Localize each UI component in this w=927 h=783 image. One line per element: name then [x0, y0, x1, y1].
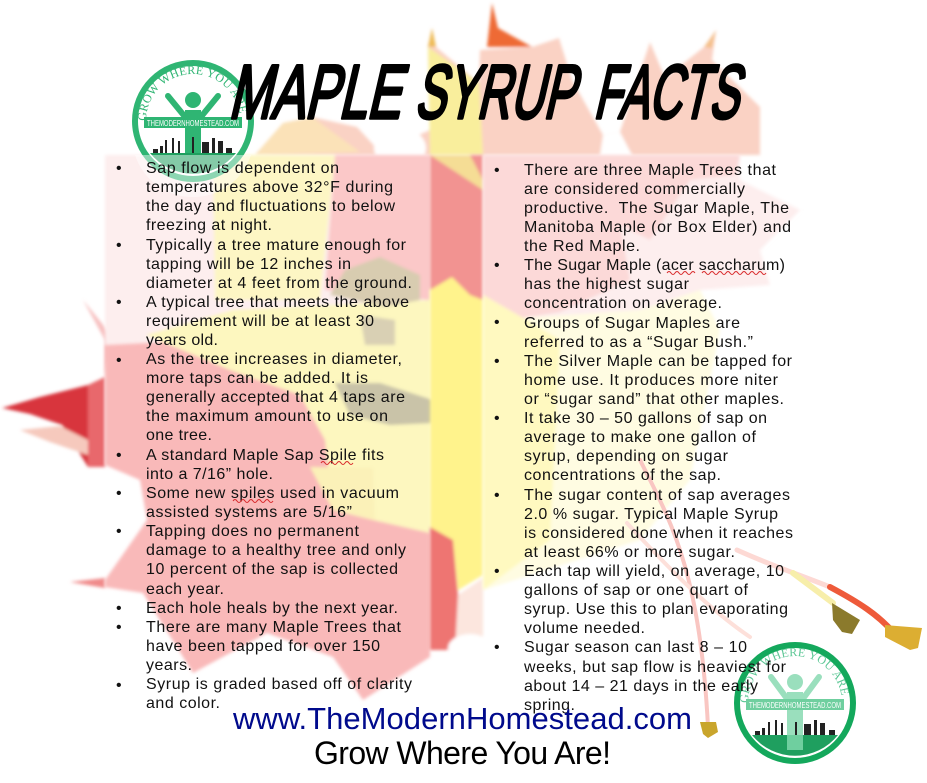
left column text: [146, 160, 412, 712]
right column text: Sugar season can last 8 – 10: [524, 639, 747, 656]
left panel wash: [105, 155, 433, 700]
left column text: more taps can be added. It is: [146, 370, 368, 387]
left column text: temperatures above 32°F during: [146, 179, 393, 196]
logo fade under panel: [135, 155, 251, 197]
logo person: [771, 674, 819, 750]
right column text: [523, 162, 793, 714]
left column text: the maximum amount to use on: [146, 408, 388, 425]
right column text: spring.: [524, 697, 575, 714]
right column bullets: •: [494, 162, 500, 179]
right column text: Groups of Sugar Maples are: [524, 315, 740, 332]
right column text: The Silver Maple can be tapped for: [524, 353, 793, 370]
right column text: concentration on average.: [524, 295, 722, 312]
right column text: syrup. Use this to plan evaporating: [524, 601, 788, 618]
left column text: Typically a tree mature enough for: [146, 237, 407, 254]
left column text: one tree.: [146, 427, 212, 444]
top leaf lobes: [255, 3, 760, 168]
left column bullets: •: [116, 485, 122, 502]
left column bullets: •: [116, 619, 122, 636]
right column text: syrup, depending on sugar: [524, 448, 729, 465]
logo top-left: [132, 60, 254, 194]
left column text: requirement will be at least 30: [146, 313, 374, 330]
logo banner: THEMODERNHOMESTEAD.COM: [749, 701, 841, 710]
left column text: each year.: [146, 581, 224, 598]
left column bullets: •: [116, 677, 122, 694]
left red tip and lobes: [2, 300, 113, 588]
title: SYRUP: [410, 50, 590, 135]
logo skyline: [755, 720, 835, 735]
right column bullets: •: [494, 487, 500, 504]
logo base: [150, 153, 236, 174]
title: [224, 50, 754, 135]
left column bullets: •: [116, 294, 122, 311]
right column text: referred to as a “Sugar Bush.”: [524, 334, 753, 351]
right column text: productive. The Sugar Maple, The: [524, 200, 789, 217]
right column text: about 14 – 21 days in the early: [524, 678, 758, 695]
right column text: concentrations of the sap.: [524, 467, 721, 484]
left column bullets: •: [116, 237, 122, 254]
right column text: or “sugar sand” that other maples.: [524, 391, 784, 408]
left column text: and color.: [146, 695, 220, 712]
left column text: Sap flow is dependent on: [146, 160, 339, 177]
right column text: home use. It produces more niter: [524, 372, 779, 389]
right column bullets: •: [494, 353, 500, 370]
right panel wash: [483, 155, 800, 590]
left column text: diameter at 4 feet from the ground.: [146, 275, 412, 292]
center band: [430, 155, 492, 662]
left column bullets: •: [116, 352, 122, 369]
logo bottom-right: [734, 642, 856, 764]
left column text: assisted systems are 5/16”: [146, 504, 352, 521]
right column text: The sugar content of sap averages: [524, 487, 790, 504]
left column text: 10 percent of the sap is collected: [146, 561, 398, 578]
left column text: As the tree increases in diameter,: [146, 351, 402, 368]
left column bullets: •: [116, 600, 122, 617]
right column text: The Sugar Maple (acer saccharum): [524, 257, 785, 274]
left column text: years old.: [146, 332, 218, 349]
right column text: volume needed.: [524, 620, 645, 637]
right column bullets: •: [494, 563, 500, 580]
stems: [627, 460, 893, 727]
left column bullets: •: [116, 523, 122, 540]
right column bullets: •: [494, 639, 500, 656]
left column text: generally accepted that 4 taps are: [146, 389, 405, 406]
left column text: freezing at night.: [146, 217, 272, 234]
left column text: tapping will be 12 inches in: [146, 256, 351, 273]
right column text: Each tap will yield, on average, 10: [524, 563, 784, 580]
title: FACTS: [589, 50, 754, 135]
left column text: Syrup is graded based off of clarity: [146, 676, 412, 693]
spell-check squiggles: [233, 272, 766, 502]
right column bullets: •: [494, 410, 500, 427]
stem ends: [700, 603, 922, 738]
left column text: into a 7/16” hole.: [146, 466, 273, 483]
right column text: at least 66% or more sugar.: [524, 544, 735, 561]
right column text: Manitoba Maple (or Box Elder) and: [524, 219, 791, 236]
left column text: Tapping does no permanent: [146, 523, 360, 540]
tagline: Grow Where You Are!: [314, 735, 611, 771]
left column text: Each hole heals by the next year.: [146, 600, 398, 617]
right column bullets: [494, 162, 793, 714]
left column text: Some new spiles used in vacuum: [146, 485, 399, 502]
logo skyline: [153, 137, 232, 153]
logo base: [752, 735, 838, 756]
right column bullets: •: [494, 314, 500, 331]
right column text: is considered done when it reaches: [524, 525, 793, 542]
right column text: There are three Maple Trees that: [524, 162, 777, 179]
left column bullets: [116, 160, 412, 712]
website url: www.TheModernHomestead.com: [232, 701, 692, 736]
left column text: damage to a healthy tree and only: [146, 542, 406, 559]
right column text: gallons of sap or one quart of: [524, 582, 749, 599]
logo banner: THEMODERNHOMESTEAD.COM: [147, 119, 239, 128]
right column text: weeks, but sap flow is heaviest for: [523, 659, 787, 676]
left column text: years.: [146, 657, 192, 674]
logo arc text: GROW WHERE YOU ARE: [138, 66, 246, 120]
right column text: the Red Maple.: [524, 238, 640, 255]
right column text: It take 30 – 50 gallons of sap on: [524, 410, 767, 427]
logo person: [168, 92, 218, 173]
left column text: There are many Maple Trees that: [146, 619, 402, 636]
left column text: A typical tree that meets the above: [146, 294, 409, 311]
left column bullets: •: [116, 447, 122, 464]
right column text: average to make one gallon of: [524, 429, 757, 446]
left column text: the day and fluctuations to below: [146, 198, 395, 215]
right column text: has the highest sugar: [524, 276, 690, 293]
left column text: A standard Maple Sap Spile fits: [146, 447, 384, 464]
right column text: 2.0 % sugar. Typical Maple Syrup: [524, 506, 778, 523]
right column text: are considered commercially: [524, 181, 745, 198]
title: MAPLE: [224, 50, 416, 135]
right column bullets: •: [494, 257, 500, 274]
left column text: have been tapped for over 150: [146, 638, 380, 655]
left column bullets: •: [116, 160, 122, 177]
logo arc text: GROW WHERE YOU ARE: [740, 648, 849, 702]
